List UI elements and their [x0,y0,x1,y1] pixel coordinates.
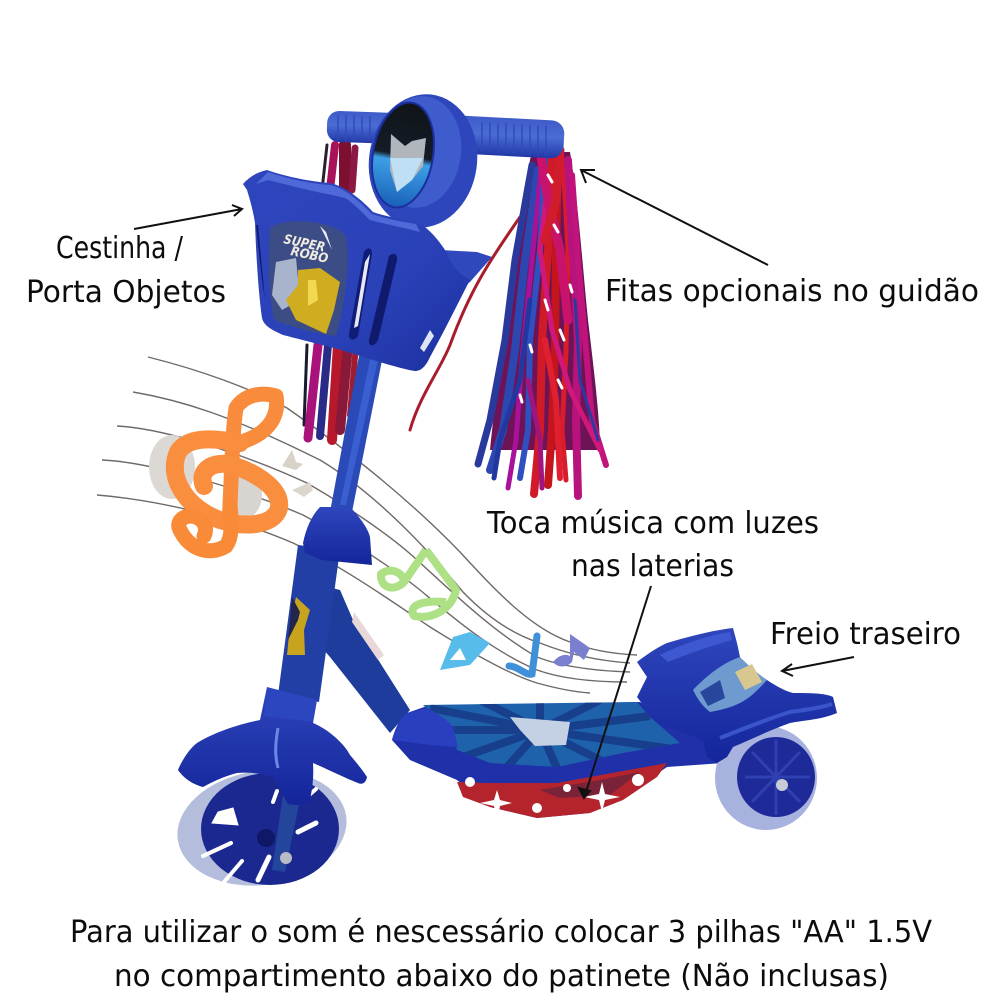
label: music and lights [486,506,819,584]
frame [278,545,410,733]
arrow: to basket [134,205,242,229]
footer note [70,915,932,994]
stem [330,340,386,512]
icon: left ribbons [304,145,520,440]
sticker title: SUPER [282,232,326,256]
label: basket: Cestinha / [56,231,184,266]
deck base [392,702,723,818]
label: music and lights: nas laterias [571,549,734,584]
arrow: to ribbons [581,170,768,265]
rear fender and brake [637,628,837,763]
handlebar [326,87,565,235]
icon: small music notes [282,450,590,674]
label: rear brake: Freio traseiro [770,617,961,652]
rear wheel [715,726,817,830]
basket [243,170,492,371]
icon: right ribbons [478,150,606,496]
label: basket: Porta Objetos [26,275,226,310]
label: basket [26,231,226,310]
deck top with rays [423,702,680,767]
deck lights [457,763,667,820]
front wheel [170,760,354,896]
front fender and fork [178,687,367,805]
arrow: to lights [579,586,651,798]
music staff lines [97,357,637,693]
footer note: no compartimento abaixo do patinete (Não inclusas) [114,959,889,994]
footer note: Para utilizar o som é nescessário colocar 3 pilhas "AA" 1.5V [70,915,932,950]
arrow: to brake [782,657,854,676]
sticker subtitle: ROBO [289,244,329,267]
label: music and lights: Toca música com luzes [486,506,819,541]
front deck joint [392,708,458,747]
label: ribbons: Fitas opcionais no guidão [605,274,979,309]
icon: orange treble clef [149,394,279,551]
steering collar [303,507,372,565]
